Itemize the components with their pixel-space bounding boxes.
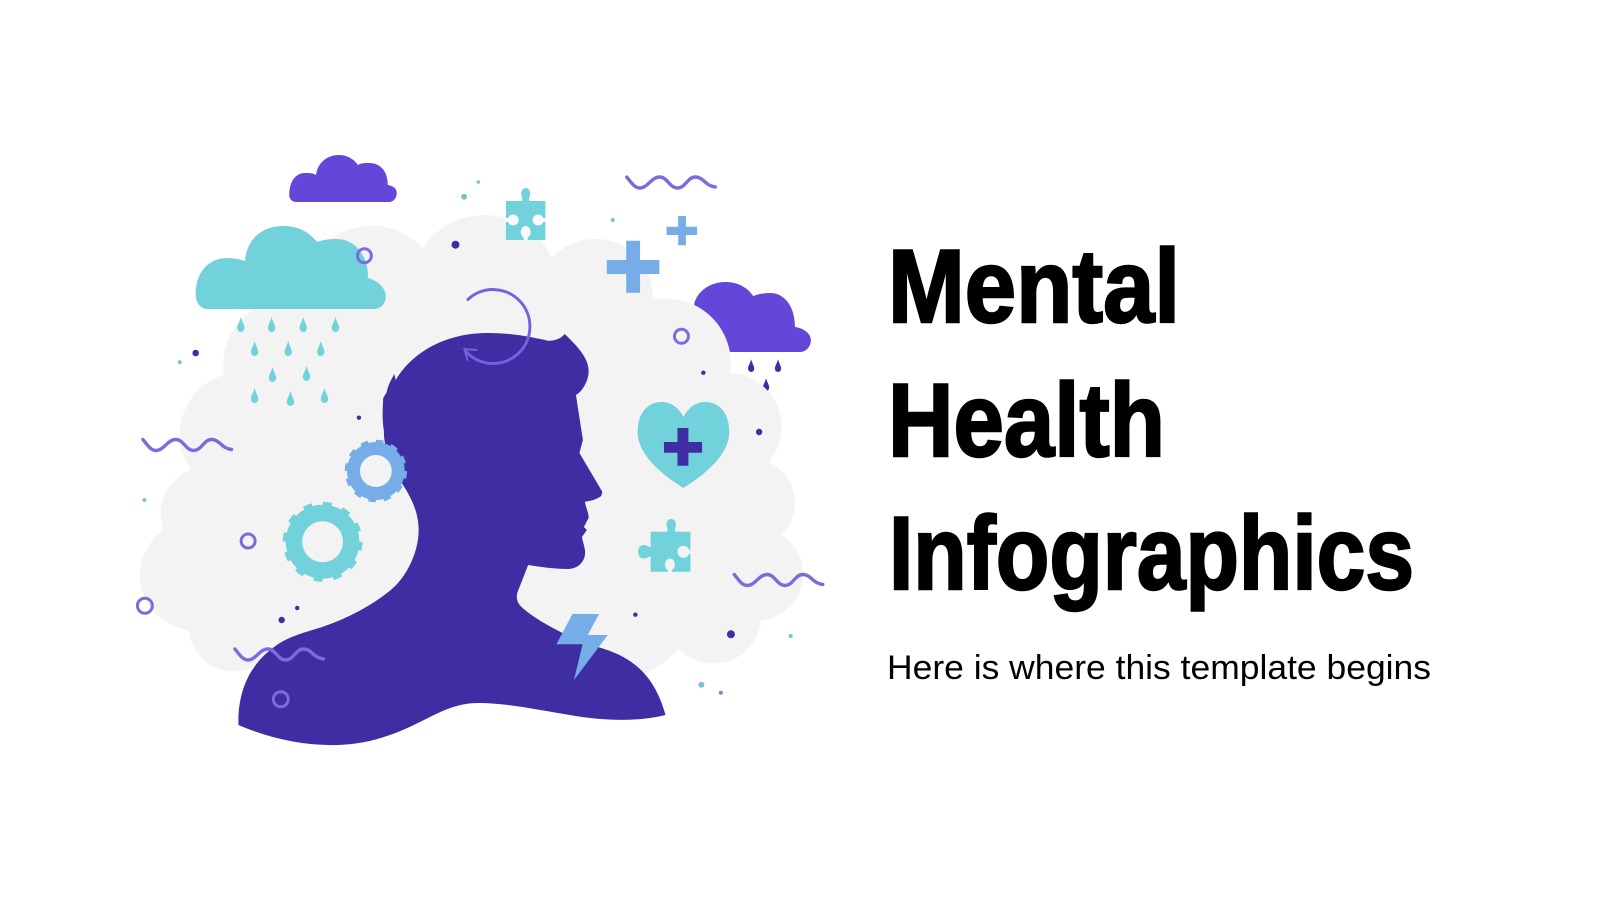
background cloud blob [140,215,803,673]
icon: blue gear [346,442,405,500]
title [888,229,1414,612]
decorative squiggles [143,177,823,660]
icon: teal rain cloud [196,226,386,406]
icon: puzzle piece lower [638,519,691,572]
icon: circular arrow [464,290,530,364]
illustration [137,155,823,745]
icon: puzzle piece top [505,188,546,241]
icon: lightning bolt [556,614,608,680]
icon: plus large [607,241,659,293]
title: Infographics [889,496,1414,612]
title: Health [888,363,1165,479]
title: Mental [888,229,1180,345]
icon: teal gear [285,504,360,580]
decorative dots [142,180,793,695]
icon: purple rain cloud right [687,282,811,391]
decorative rings [137,249,688,707]
head silhouette [238,333,666,745]
icon: heart with plus [638,402,729,488]
icon: purple cloud top [289,155,397,202]
subtitle: Here is where this template begins [887,649,1431,687]
icon: plus small [667,216,697,245]
